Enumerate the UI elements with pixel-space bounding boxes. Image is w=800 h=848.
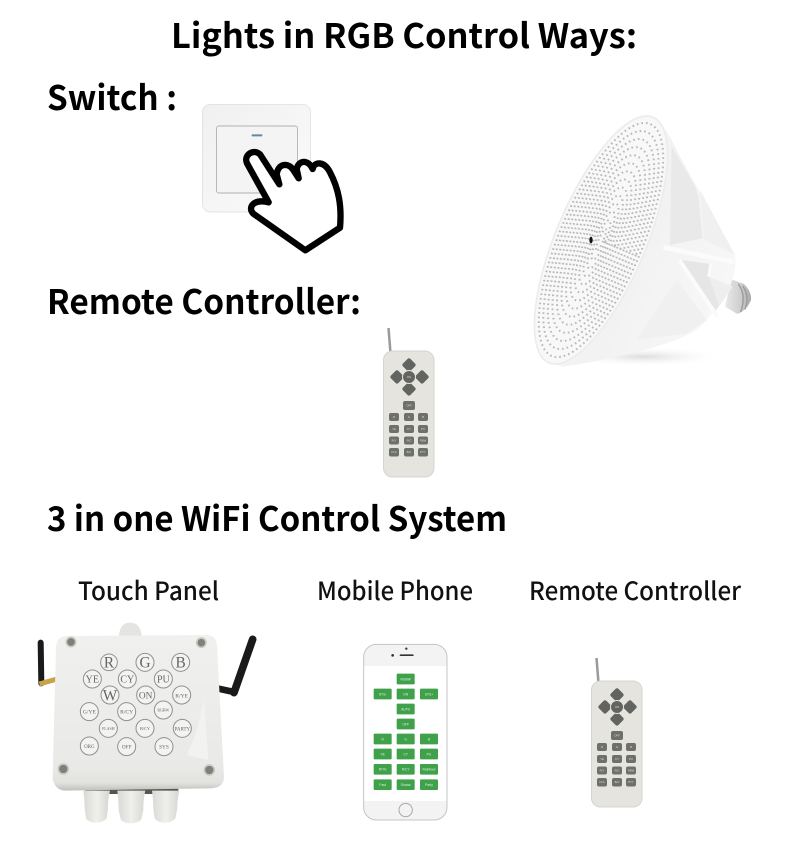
key labels: R/C	[407, 438, 411, 442]
key labels: PU	[421, 427, 425, 431]
app button labels: SYS+	[425, 692, 433, 696]
keypad	[389, 401, 428, 456]
remote body	[592, 681, 642, 807]
button labels: ON	[139, 691, 153, 701]
key labels: B/C	[615, 780, 619, 784]
direction pad	[390, 358, 429, 396]
app button labels: G	[404, 737, 407, 741]
wall plate	[202, 104, 311, 212]
direction pad: ON	[615, 705, 619, 709]
app button labels: Rainbow	[423, 768, 436, 772]
app button labels	[379, 677, 436, 787]
key labels: B/C	[407, 450, 411, 454]
button labels: RGBW	[157, 708, 170, 713]
keypad	[597, 731, 636, 786]
icon: LED pool lamp	[507, 100, 751, 380]
button labels	[83, 655, 191, 751]
hand	[246, 152, 341, 250]
key labels: R	[601, 745, 603, 749]
button labels: R/YE	[175, 693, 189, 699]
button labels: SYS	[159, 745, 169, 751]
left antenna	[39, 643, 56, 684]
app button labels: RGBW	[400, 677, 412, 681]
heading: switch: Switch :	[47, 71, 177, 120]
direction pad: ON	[407, 375, 411, 379]
screw base	[725, 279, 751, 314]
app button labels: Shows	[401, 783, 411, 787]
key labels: RBW	[628, 768, 635, 772]
key labels: PU	[629, 757, 633, 761]
key labels: PTY	[420, 450, 426, 454]
key labels: FLS	[391, 450, 397, 454]
speaker and camera	[391, 647, 414, 657]
key labels	[599, 734, 635, 784]
lamp shadow	[560, 347, 727, 367]
button labels: YE	[86, 675, 99, 686]
key labels: OFF	[614, 734, 620, 738]
key labels: PTY	[628, 780, 634, 784]
app button labels: ON	[403, 692, 409, 696]
cable glands	[83, 787, 179, 823]
app button labels: R/CY	[402, 768, 410, 772]
key labels: YE	[392, 427, 396, 431]
right antenna	[215, 639, 253, 693]
rocker button	[217, 126, 297, 193]
icon: remote controller	[384, 328, 434, 477]
key labels: G	[616, 745, 618, 749]
icon: remote controller (wifi system)	[592, 658, 642, 807]
key labels: RBW	[420, 438, 427, 442]
button labels: FLASH	[102, 726, 115, 731]
direction pad	[598, 688, 637, 726]
top knob	[119, 623, 142, 637]
panel reflection	[187, 700, 208, 760]
centre hole	[589, 237, 593, 243]
cone housing	[550, 117, 735, 367]
icon: mobile phone	[364, 644, 447, 820]
button labels: CY	[120, 675, 134, 686]
phone body	[364, 644, 447, 820]
app buttons	[374, 674, 438, 790]
key labels: FLS	[599, 780, 605, 784]
caption: touch panel: Touch Panel	[78, 572, 219, 608]
home button	[399, 803, 412, 817]
app button labels: R	[381, 737, 384, 741]
button labels: B	[176, 655, 186, 672]
button labels: OFF	[122, 745, 132, 751]
app button labels: SYS-	[379, 692, 387, 696]
button labels: W	[103, 688, 118, 705]
app button labels: R/YE	[379, 768, 387, 772]
key labels: R/Y	[392, 438, 396, 442]
button labels: R/CY	[120, 710, 133, 716]
antenna	[388, 328, 390, 353]
key labels: G	[408, 415, 410, 419]
button labels: R	[104, 655, 115, 672]
key labels: YE	[600, 757, 604, 761]
button labels: PU	[157, 675, 170, 686]
corner screws	[58, 637, 214, 775]
key labels: CY	[615, 757, 619, 761]
housing panels	[637, 147, 735, 340]
key labels: B	[630, 745, 632, 749]
box body	[53, 635, 224, 791]
heading: remote controller: Remote Controller:	[47, 275, 361, 324]
touch buttons	[80, 653, 191, 756]
icon: touch panel control box	[39, 623, 253, 823]
app button labels: B	[428, 737, 431, 741]
app button labels: CY	[403, 752, 409, 756]
button labels: ORG	[84, 745, 95, 750]
lamp face	[507, 100, 695, 380]
indicator light	[252, 134, 262, 136]
title: Lights in RGB Control Ways:	[171, 9, 637, 58]
key labels: OFF	[406, 404, 412, 408]
app button labels: AUTO	[401, 707, 411, 711]
key labels	[391, 404, 427, 454]
button labels: B/CY	[140, 726, 151, 731]
app button labels: OFF	[402, 722, 409, 726]
app button labels: Fast	[379, 783, 386, 787]
remote body	[384, 351, 434, 477]
app button labels: Party	[425, 783, 433, 787]
heading: wifi control system: 3 in one WiFi Control System	[47, 492, 507, 541]
button labels: G/YE	[83, 710, 96, 716]
app button labels: PU	[427, 752, 432, 756]
key labels: R/Y	[600, 768, 604, 772]
caption: remote controller: Remote Controller	[529, 572, 742, 608]
button labels: G	[139, 655, 151, 672]
icon: wall switch with pointing hand	[202, 104, 341, 250]
key labels: B	[422, 415, 424, 419]
key labels: CY	[407, 427, 411, 431]
screen	[364, 666, 446, 801]
button labels: PARTY	[175, 727, 191, 732]
key labels: R	[393, 415, 395, 419]
antenna	[596, 658, 598, 683]
key labels: R/C	[615, 768, 619, 772]
caption: mobile phone: Mobile Phone	[317, 572, 473, 608]
app button labels: YE	[380, 752, 386, 756]
